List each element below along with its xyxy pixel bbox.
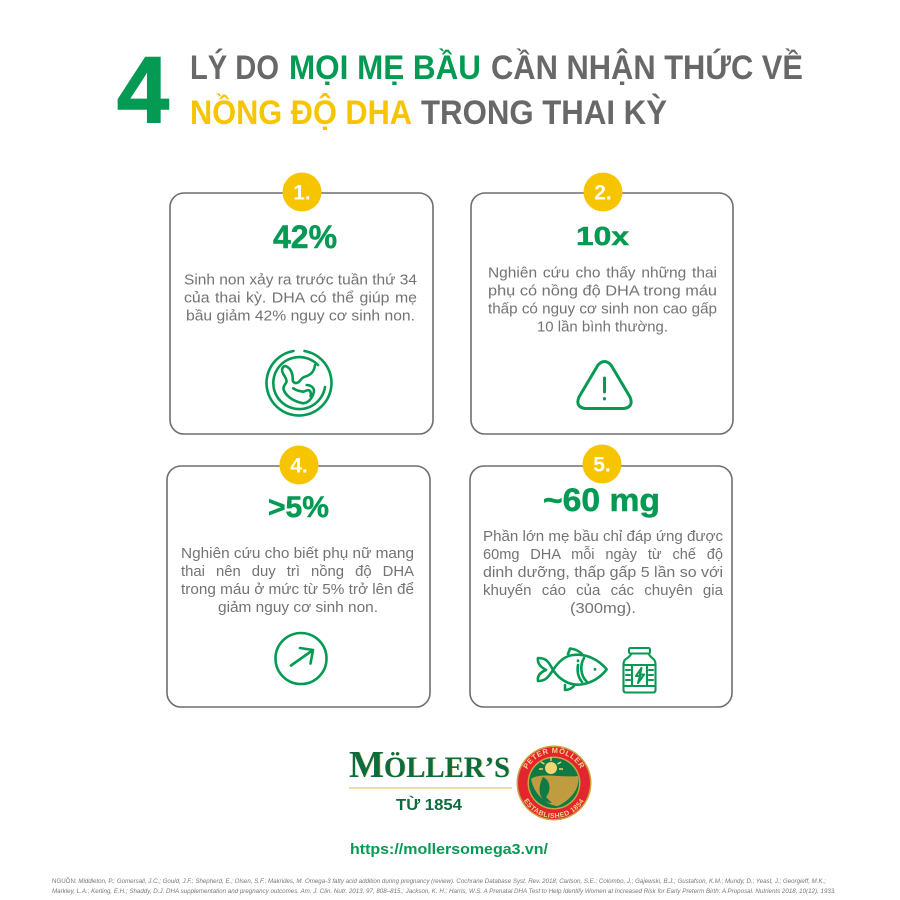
title <box>117 37 803 142</box>
body text <box>181 545 414 616</box>
badge 5: 5. <box>593 454 611 476</box>
body text: Nghiên cứu cho thấy những thai <box>488 264 717 282</box>
tagline: TỪ 1854 <box>396 795 462 814</box>
body text: trong máu ở mức từ 5% trở lên để <box>181 581 414 598</box>
stat 42%: 42% <box>273 219 337 255</box>
seal: PETER MÖLLER <box>523 747 584 769</box>
body text <box>184 272 417 324</box>
body text: phụ có nồng độ DHA trong máu <box>488 282 717 300</box>
body text: giảm nguy cơ sinh non. <box>218 599 378 616</box>
icon: supplement jar <box>624 648 656 692</box>
panel: ~60 mg <box>470 444 732 707</box>
title: CẦN NHẬN THỨC VỀ <box>491 47 803 87</box>
body text: Sinh non xảy ra trước tuần thứ 34 <box>184 272 417 288</box>
rule <box>349 787 512 789</box>
seal <box>516 746 592 820</box>
logo: Möller's <box>349 744 592 820</box>
badge 1 <box>282 172 322 212</box>
title: NỒNG ĐỘ DHA <box>190 92 412 132</box>
body text <box>483 528 724 617</box>
panel: >5% <box>167 446 430 707</box>
panel: 10x <box>471 172 733 434</box>
body text: 10 lần bình thường. <box>537 318 668 336</box>
website link: https://mollersomega3.vn/ <box>350 841 549 858</box>
sources footnote: Markley, L.A.; Kerling, E.H.; Shaddy, D.J. DHA supplementation and pregnancy outcomes. Am. J. Clin. Nutr. 2013, 97, 808–815.; Jackson, K. H.; Harris, W.S. A Prenatal DHA Test to Help Identify Women at Increased Risk for Early Preterm Birth: A Proposal. Nutrients 2018, 10(12), 1933. <box>52 888 836 895</box>
badge 4 <box>280 446 318 484</box>
seal: ESTABLISHED 1854 <box>524 798 584 818</box>
badge 2 <box>584 172 622 212</box>
title: TRONG THAI KỲ <box>421 92 667 132</box>
body text: thai nên duy trì nồng độ DHA <box>181 563 414 580</box>
body text: Nghiên cứu cho biết phụ nữ mang <box>181 545 414 562</box>
title: MỌI MẸ BẦU <box>289 47 481 87</box>
sources footnote: NGUỒN: Middleton, P.; Gomersall, J.C.; Gould, J.F.; Shepherd, E.; Olsen, S.F.; Makrides, M. Omega-3 fatty acid addition during pregnancy (review). Cochrane Database Syst. Rev. 2018; Carlson, S.E.; Colombo, J.; Gajewski, B.J.; Gustafson, K.M.; Mundy, D.; Yeast, J.; Georgieff, M.K.; <box>52 875 826 885</box>
icon: arrow in circle <box>276 633 326 684</box>
body text: của thai kỳ. DHA có thể giúp mẹ <box>184 290 417 306</box>
body text: 60mg DHA mỗi ngày từ chế độ <box>483 546 723 563</box>
stat >5%: >5% <box>268 491 329 524</box>
badge 4: 4. <box>290 454 308 478</box>
body text: (300mg). <box>570 600 636 617</box>
title: 4 <box>117 37 169 142</box>
body text: thấp có nguy cơ sinh non cao gấp <box>488 300 717 318</box>
icon: embryo <box>267 351 332 416</box>
badge 1: 1. <box>293 182 311 204</box>
body text: dinh dưỡng, thấp gấp 5 lần so với <box>483 564 723 581</box>
body text <box>488 264 717 336</box>
body text: bầu giảm 42% nguy cơ sinh non. <box>186 308 415 324</box>
panel: 42% <box>170 172 433 434</box>
icon: fish <box>538 648 607 690</box>
stat ~60 mg: ~60 mg <box>543 482 660 518</box>
wordmark: MÖLLER’S <box>349 744 510 786</box>
body text: khuyến cáo của các chuyên gia <box>483 582 724 599</box>
badge 5 <box>582 444 622 484</box>
stat 10x: 10x <box>576 221 630 251</box>
icon: warning triangle <box>578 362 631 408</box>
body text: Phần lớn mẹ bầu chỉ đáp ứng được <box>483 528 723 545</box>
badge 2: 2. <box>594 182 612 204</box>
title: LÝ DO <box>190 47 279 87</box>
sources footnote <box>52 875 836 895</box>
